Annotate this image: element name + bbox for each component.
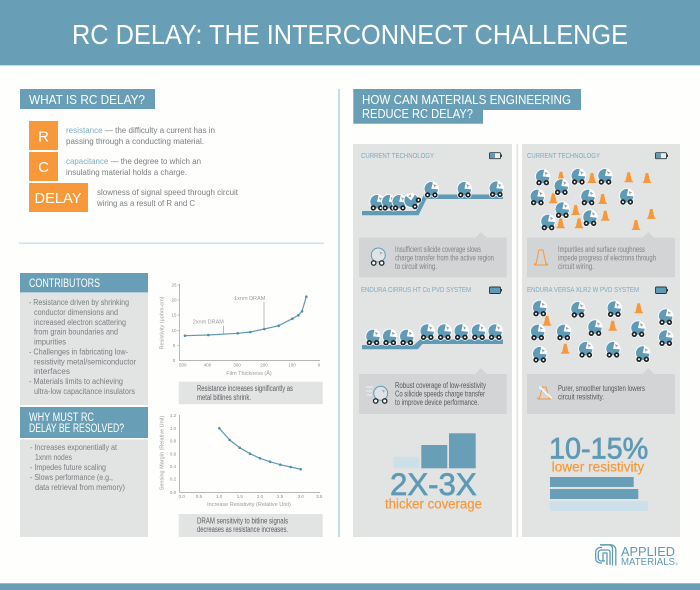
chart: sensing margin vs resistivity: 2.0 (257, 494, 264, 499)
definition: resistance: resistance — the difficulty a current has in (66, 125, 215, 135)
callout: robust coverage: Robust coverage of low-resistivity (395, 381, 486, 390)
why list: data retrieval from memory) (35, 482, 125, 492)
chart: sensing margin vs resistivity: Sensing Margin (Relative Unit) (160, 416, 166, 490)
definition: capacitance (29, 152, 201, 181)
contributors list: from grain boundaries and (34, 326, 118, 336)
contributors list: resistivity metal/semiconductor (34, 356, 136, 366)
label: current technology: CURRENT TECHNOLOGY (527, 151, 600, 160)
contributors list: impurities (34, 336, 66, 346)
chart: sensing margin vs resistivity: 1.2 (170, 413, 177, 418)
heading: how can materials engineering: REDUCE RC DELAY? (362, 106, 473, 121)
electrons: Endura Cirrus (365, 323, 503, 346)
heading: what is RC delay: WHAT IS RC DELAY? (29, 92, 145, 107)
panel: why must RC delay be resolved: DELAY BE RESOLVED? (29, 423, 124, 435)
why list (30, 442, 125, 492)
chart: sensing margin vs resistivity: 0.0 (170, 490, 177, 495)
chart note: DRAM sensitivity: DRAM sensitivity to bitline signals (197, 516, 288, 526)
logo: Applied Materials: APPLIED (621, 544, 675, 559)
panel: tungsten comparison (522, 144, 680, 537)
definition: delay: slowness of signal speed through circuit (97, 187, 239, 197)
definition: resistance: passing through a conducting material. (66, 136, 204, 146)
definition: capacitance: capacitance — the degree to which an (66, 156, 201, 166)
why list: - Increases exponentially at (30, 442, 118, 452)
callout: insufficient coverage: to circuit wiring. (395, 262, 437, 271)
definition: capacitance: C (38, 159, 49, 176)
contributors list: - Resistance driven by shrinking (29, 297, 129, 307)
callout: purer tungsten: Purer, smoother tungsten lowers (558, 384, 645, 393)
title: RC DELAY: THE INTERCONNECT CHALLENGE (72, 19, 628, 50)
cones: Endura Versa (543, 303, 643, 354)
chart: sensing margin vs resistivity: 0.6 (170, 452, 177, 456)
definition: resistance: R (38, 128, 49, 146)
chart: sensing margin vs resistivity: 3.0 (298, 494, 304, 499)
chart: resistivity vs film thickness: 0 (318, 362, 321, 368)
contributors list: - Materials limits to achieving (29, 376, 123, 386)
chart: sensing margin vs resistivity: Increase Resistivity (Relative Unit) (207, 502, 291, 508)
definition: delay (29, 183, 239, 212)
callout: impurities: circuit wiring. (558, 262, 594, 271)
chart: sensing margin vs resistivity: 3.5 (316, 494, 323, 499)
callout: robust coverage: to improve device performance. (395, 398, 479, 407)
electrons: Endura Versa (530, 300, 673, 363)
chart: resistivity vs film thickness (160, 282, 321, 377)
callout: robust coverage: Co silicide speeds charge transfer (395, 390, 485, 398)
icon: low battery (490, 153, 502, 159)
label: current technology: CURRENT TECHNOLOGY (361, 151, 434, 160)
callout: robust coverage (359, 368, 507, 414)
contributors list (29, 297, 136, 396)
logo mark (596, 545, 616, 566)
callout: impurities (527, 232, 675, 277)
why list: 1xnm nodes (35, 452, 72, 462)
electrons: current cobalt (369, 181, 504, 212)
chart note: resistance (179, 382, 323, 404)
logo: Applied Materials: MATERIALS (621, 557, 675, 568)
label: Endura Versa: ENDURA VERSA XLR2 W PVD SYSTEM (527, 285, 639, 294)
chart: sensing margin vs resistivity: 0.8 (170, 438, 177, 444)
electrons: current tungsten (530, 168, 634, 231)
icon: full battery (490, 287, 502, 294)
chart: resistivity vs film thickness: 500 (179, 362, 187, 368)
contributors list: interfaces (34, 366, 70, 376)
why list: - Slows performance (e.g., (30, 472, 113, 482)
chart: resistivity vs film thickness: 400 (204, 362, 212, 368)
chart: sensing margin vs resistivity: 2.5 (277, 494, 284, 499)
callout: impurities: Impurities and surface roughness (558, 245, 645, 254)
chart note: resistance: Resistance increases significantly as (197, 384, 293, 393)
silicide road: Endura Cirrus (362, 340, 503, 349)
chart: resistivity vs film thickness: Resistivity (µohm-cm) (160, 296, 166, 349)
heading: how can materials engineering (353, 89, 581, 124)
chart: sensing margin vs resistivity: 1.5 (237, 494, 243, 499)
heading: what is RC delay (20, 89, 155, 109)
chart: sensing margin vs resistivity (160, 413, 323, 508)
logo: Applied Materials (596, 544, 678, 568)
panel: why must RC delay be resolved (20, 407, 148, 537)
stat bars: coverage (393, 433, 476, 468)
callout: insufficient coverage: Insufficient silicide coverage slows (395, 245, 481, 254)
label: Endura Cirrus: ENDURA CIRRUS HT Co PVD SYSTEM (361, 285, 471, 294)
chart note: DRAM sensitivity (179, 514, 323, 537)
definition: delay: wiring as a result of R and C (96, 198, 195, 208)
heading: how can materials engineering: HOW CAN MATERIALS ENGINEERING (362, 92, 571, 107)
stat: 2X-3X thicker coverage: 2X-3X (390, 466, 477, 502)
chart: resistivity vs film thickness: Film Thickness (Å) (226, 370, 272, 377)
callout: purer tungsten: circuit resistivity. (558, 392, 604, 402)
callout: insufficient coverage: charge transfer from the active region (395, 254, 494, 262)
chart: resistivity vs film thickness: 200 (260, 362, 268, 368)
why list: - Impedes future scaling (30, 462, 106, 472)
contributors list: increased electron scattering (34, 317, 126, 327)
chart: resistivity vs film thickness: 25 (171, 282, 177, 288)
chart: sensing margin vs resistivity: 0.0 (179, 494, 185, 499)
chart: sensing margin vs resistivity: 0.5 (196, 494, 203, 499)
chart: resistivity vs film thickness: 20 (171, 298, 177, 302)
chart: resistivity vs film thickness: 100 (288, 362, 296, 368)
definition: capacitance: insulating material holds a charge. (66, 167, 187, 177)
panel: cobalt comparison (353, 144, 512, 537)
chart: resistivity vs film thickness: 2xnm DRAM (193, 320, 224, 326)
chart: resistivity vs film thickness: 300 (233, 362, 241, 368)
callout: insufficient coverage (359, 232, 507, 277)
chart: sensing margin vs resistivity: 0.4 (170, 464, 177, 469)
header banner (0, 0, 700, 66)
callout: purer tungsten (527, 368, 675, 414)
definition: resistance (29, 121, 215, 150)
chart: resistivity vs film thickness: 0 (173, 358, 176, 363)
stat: 10-15% lower resistivity: 10-15% (549, 432, 648, 465)
icon: low battery (656, 153, 668, 159)
contributors list: - Challenges in fabricating low- (29, 346, 128, 356)
panel: why must RC delay be resolved: WHY MUST RC (29, 412, 94, 424)
stat: 10-15% lower resistivity: lower resistivity (552, 460, 644, 475)
contributors list: conductor dimensions and (34, 307, 118, 317)
stat bars: resistivity (550, 477, 648, 511)
chart: resistivity vs film thickness: 1xnm DRAM (234, 296, 266, 302)
stat: 2X-3X thicker coverage: thicker coverage (385, 496, 482, 511)
contributors list: ultra-low capacitance insulators (34, 386, 135, 396)
chart note: resistance: metal bitlines shrink. (197, 393, 251, 402)
chart: resistivity vs film thickness: 10 (171, 328, 177, 333)
definition: delay: DELAY (34, 190, 82, 207)
panel: contributors: CONTRIBUTORS (29, 278, 100, 290)
footer bar (0, 583, 700, 590)
chart note: DRAM sensitivity: decreases as resistance increases. (197, 525, 288, 534)
cones: current tungsten (549, 172, 656, 230)
chart: sensing margin vs resistivity: 1.0 (170, 426, 177, 431)
silicide road: current (362, 194, 503, 215)
icon: full battery (656, 287, 668, 294)
chart: sensing margin vs resistivity: 1.0 (216, 494, 223, 499)
panel: contributors (20, 273, 148, 405)
chart: resistivity vs film thickness: 5 (173, 343, 176, 348)
logo: Applied Materials: ® (676, 562, 678, 566)
chart: sensing margin vs resistivity: 0.2 (170, 476, 177, 482)
chart: resistivity vs film thickness: 15 (171, 312, 177, 318)
callout: impurities: impede progress of electrons through (558, 254, 656, 262)
